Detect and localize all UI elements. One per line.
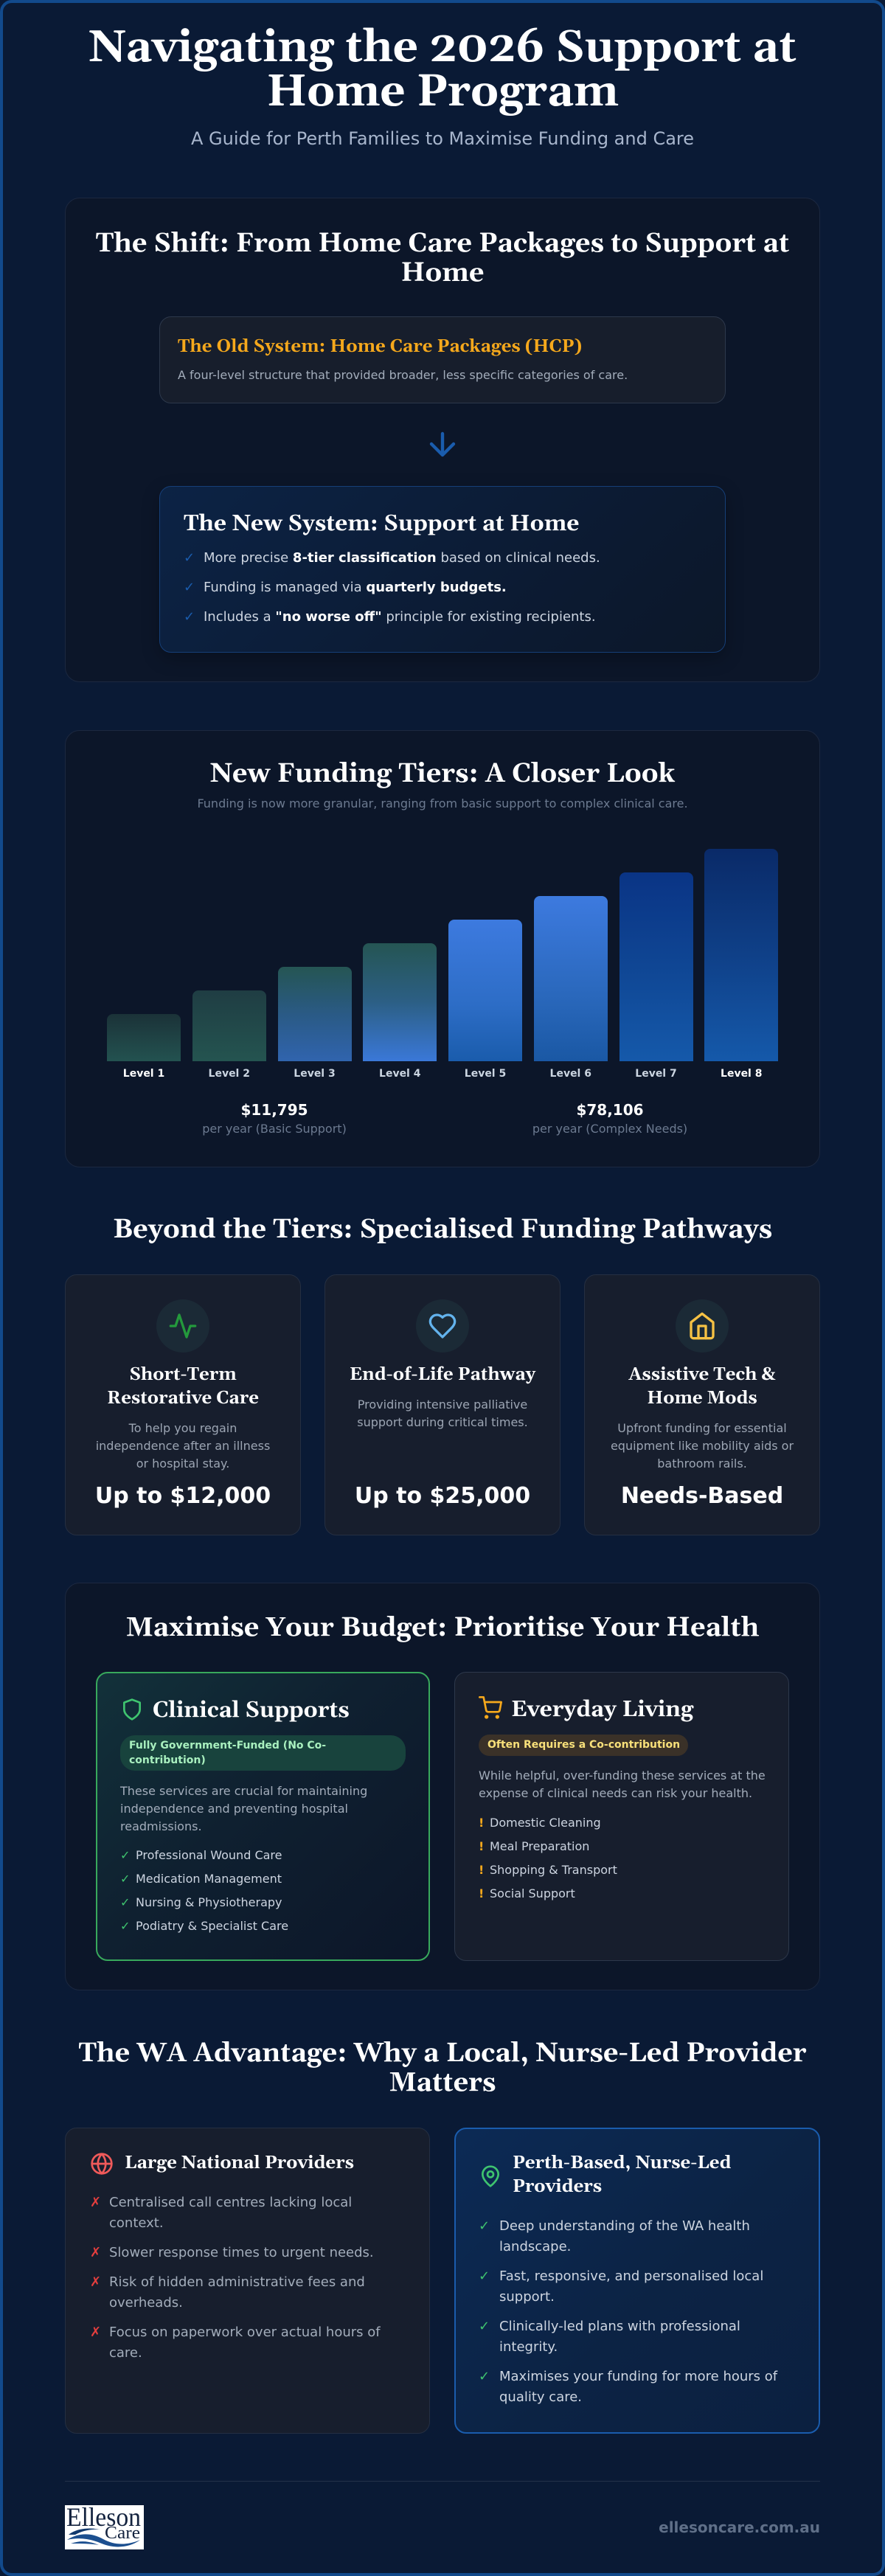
bar: level 8 [704,849,778,1061]
everyday list: Domestic Cleaning [490,1816,601,1830]
national providers list: ✗ [90,2195,101,2210]
stat: highest funding [532,1101,687,1136]
card description [96,1421,270,1471]
heading: the WA advantage [78,2038,807,2100]
card value: Up to $12,000 [95,1483,271,1509]
card value: Needs-Based [621,1483,783,1509]
clinical list: ✓ [120,1848,130,1862]
everyday list: Social Support [490,1886,575,1900]
level labels [123,1068,762,1080]
panel: perth-based nurse-led providers [454,2128,820,2434]
logo: Elleson Care: Care [105,2524,140,2543]
national providers heading: Large National Providers [125,2153,354,2175]
clinical description: independence and preventing hospital [120,1802,348,1816]
everyday list: ! [479,1839,484,1853]
card description: support during critical times. [357,1415,528,1429]
perth providers list: quality care. [499,2389,582,2405]
perth providers list: integrity. [499,2339,558,2355]
card title: Assistive Tech & [628,1364,776,1386]
card title: Home Mods [647,1388,757,1410]
stat: lowest funding: $11,795 [240,1101,308,1119]
clinical description: These services are crucial for maintaining [120,1784,367,1798]
badge: fully government-funded: contribution) [129,1754,206,1766]
card description: Upfront funding for essential [617,1421,787,1435]
national providers list: Risk of hidden administrative fees and [109,2274,365,2290]
bar: level 2 [192,990,266,1061]
new system list: More precise 8-tier classification based on clinical needs. [204,550,600,566]
stat: lowest funding [202,1101,347,1136]
subtitle: A Guide for Perth Families to Maximise Funding and Care [191,128,694,149]
new system list [184,550,600,625]
bar: level 3 [277,967,351,1061]
level labels: Level 5 [465,1068,506,1080]
bar chart: funding levels [107,849,778,1080]
badge: fully government-funded: Fully Government-Funded (No Co- [129,1740,326,1752]
icon: map pin [482,2165,499,2187]
heading: the shift: Home [401,257,484,291]
national providers list: ✗ [90,2245,101,2260]
national providers list [90,2195,381,2361]
everyday living heading: Everyday Living [511,1696,693,1724]
card title [628,1364,776,1410]
bar: level 6 [534,896,608,1061]
card: end-of-life pathway [324,1274,560,1535]
national providers list: overheads. [109,2295,183,2311]
stat: lowest funding: per year (Basic Support) [202,1122,347,1136]
panel: clinical supports [96,1672,430,1961]
card: assistive tech [584,1274,820,1535]
perth providers heading: Perth-Based, Nurse-Led [513,2153,731,2175]
perth providers list: Maximises your funding for more hours of [499,2369,777,2384]
card description: or hospital stay. [136,1457,229,1471]
panel: large national providers [65,2128,430,2434]
stat: highest funding: per year (Complex Needs) [532,1122,687,1136]
new system list: Includes a "no worse off" principle for existing recipients. [204,609,596,625]
heading: the shift: The Shift: From Home Care Packages to Support at [96,228,789,261]
heading: maximise your budget: Maximise Your Budget: Prioritise Your Health [126,1612,759,1645]
badge: often requires a co-contribution: Often Requires a Co-contribution [487,1739,680,1751]
perth providers list: Clinically-led plans with professional [499,2319,740,2334]
panel: funding tiers [65,730,820,1167]
perth providers list: ✓ [479,2319,490,2334]
icon: activity [156,1299,209,1353]
card description: Providing intensive palliative [358,1398,527,1412]
level labels: Level 6 [550,1068,591,1080]
clinical list: ✓ [120,1919,130,1933]
national providers list: context. [109,2215,164,2231]
perth providers list: Fast, responsive, and personalised local [499,2268,763,2284]
national providers list: ✗ [90,2274,101,2290]
card description: equipment like mobility aids or [611,1439,794,1453]
title: Navigating the 2026 Support at [88,20,796,77]
everyday list: ! [479,1886,484,1900]
badge: often requires a co-contribution [479,1735,688,1756]
perth providers list: Deep understanding of the WA health [499,2218,750,2234]
heading: the WA advantage: The WA Advantage: Why a Local, Nurse-Led Provider [78,2038,807,2071]
badge: fully government-funded [120,1735,406,1771]
icon: shopping cart [479,1696,502,1719]
icon: home [676,1299,729,1353]
panel: everyday living [454,1672,789,1961]
national providers list: care. [109,2345,142,2361]
panel: the shift [65,198,820,682]
card title: Restorative Care [107,1388,259,1410]
funding tiers subtitle: Funding is now more granular, ranging from basic support to complex clinical care. [197,796,688,810]
national providers list: ✗ [90,2325,101,2340]
new system heading: The New System: Support at Home [184,510,579,538]
bar: level 1 [107,1014,181,1061]
level labels: Level 3 [294,1068,336,1080]
perth providers heading [513,2153,731,2198]
everyday description [479,1768,766,1800]
clinical list: ✓ [120,1895,130,1909]
perth providers list: support. [499,2289,555,2305]
everyday list: ! [479,1863,484,1877]
national providers list: Centralised call centres lacking local [109,2195,352,2210]
new system list: Funding is managed via quarterly budgets. [204,580,507,595]
card title: Short-Term [129,1364,237,1386]
panel: new system [159,486,726,653]
level labels: Level 7 [635,1068,677,1080]
clinical description [119,1784,367,1833]
bar: level 5 [448,920,522,1061]
clinical list: ✓ [120,1872,130,1886]
logo: Elleson Care [65,2505,144,2549]
perth providers list: ✓ [479,2218,490,2234]
clinical list: Medication Management [136,1872,282,1886]
clinical description: readmissions. [120,1819,202,1833]
everyday list: ! [479,1816,484,1830]
everyday list: Meal Preparation [490,1839,589,1853]
national providers list: Slower response times to urgent needs. [109,2245,374,2260]
old system description: A four-level structure that provided broader, less specific categories of care. [178,368,628,382]
icon: heart [416,1299,469,1353]
heading: funding tiers: New Funding Tiers: A Closer Look [210,758,675,791]
arrow: old to new [429,432,456,457]
clinical supports heading: Clinical Supports [153,1697,350,1725]
card: short-term restorative care [65,1274,301,1535]
everyday description: While helpful, over-funding these services at the [479,1768,766,1782]
perth providers list [479,2218,777,2405]
stat: highest funding: $78,106 [576,1101,644,1119]
heading: pathways: Beyond the Tiers: Specialised Funding Pathways [113,1214,772,1247]
everyday list [479,1816,617,1900]
everyday description: expense of clinical needs can risk your health. [479,1786,752,1800]
card title: End-of-Life Pathway [350,1364,535,1386]
heading: the shift [96,228,789,291]
clinical list: Professional Wound Care [136,1848,282,1862]
level labels: Level 4 [379,1068,420,1080]
old system heading: The Old System: Home Care Packages (HCP) [178,336,582,358]
new system list: ✓ [184,550,195,566]
card description: independence after an illness [96,1439,270,1453]
title [88,20,796,121]
panel: old system [159,316,726,403]
new system list: ✓ [184,580,195,595]
icon: shield [123,1698,141,1721]
card description [611,1421,794,1471]
card description: To help you regain [129,1421,237,1435]
website: ellesoncare.com.au [659,2518,820,2536]
perth providers list: landscape. [499,2239,571,2254]
perth providers list: ✓ [479,2268,490,2284]
card description [357,1398,528,1429]
bar: level 4 [363,943,437,1061]
clinical list [120,1848,288,1933]
card title [107,1364,259,1410]
perth providers heading: Providers [513,2176,602,2198]
level labels: Level 2 [209,1068,250,1080]
national providers list: Focus on paperwork over actual hours of [109,2325,381,2340]
title: Home Program [266,64,619,121]
level labels: Level 8 [721,1068,762,1080]
level labels: Level 1 [123,1068,164,1080]
heading: the WA advantage: Matters [389,2067,496,2100]
panel: maximise your budget [65,1583,820,1990]
everyday list: Shopping & Transport [490,1863,617,1877]
new system list: ✓ [184,609,195,625]
perth providers list: ✓ [479,2369,490,2384]
bar: level 7 [620,872,693,1061]
icon: globe [91,2153,113,2175]
clinical list: Podiatry & Specialist Care [136,1919,288,1933]
card value: Up to $25,000 [355,1483,530,1509]
clinical list: Nursing & Physiotherapy [136,1895,282,1909]
card description: bathroom rails. [657,1457,747,1471]
